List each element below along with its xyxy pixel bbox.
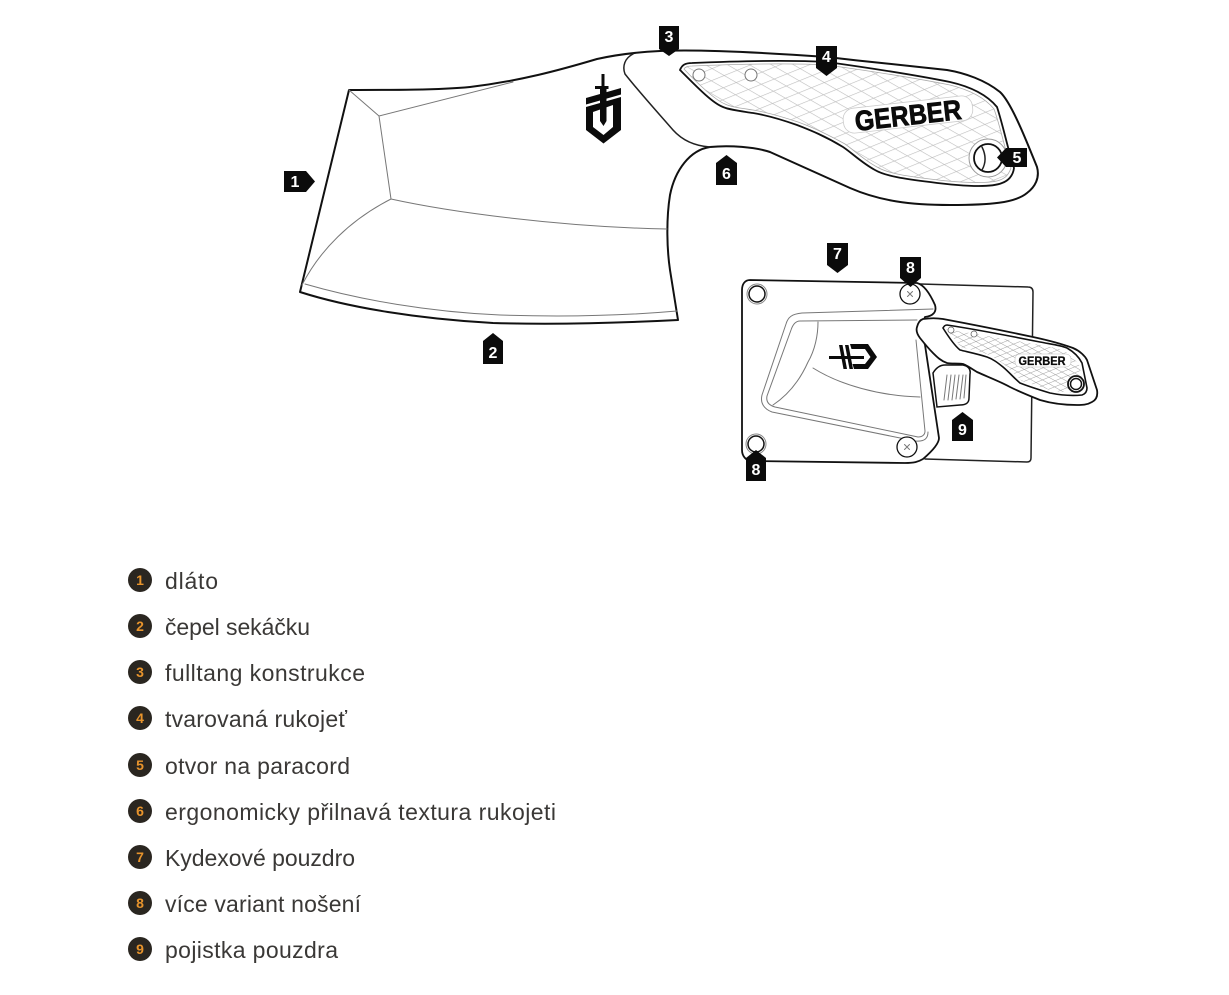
Gerber shield logo: [586, 74, 621, 144]
callout 5: [997, 148, 1027, 167]
paracord hole: [969, 139, 1007, 177]
handle scale with mesh texture: [680, 61, 1014, 186]
legend item 8: 8: [136, 895, 144, 911]
legend item 4: tvarovaná rukojeť: [165, 706, 347, 732]
legend list: [128, 568, 556, 963]
legend item 3: fulltang konstrukce: [165, 660, 365, 686]
legend item 5: otvor na paracord: [165, 753, 350, 779]
GERBER logo plate: GERBER: [853, 94, 963, 137]
legend item 1: dláto: [165, 568, 218, 594]
backing panel: [920, 284, 1033, 462]
legend item 1: [128, 568, 218, 594]
legend item 6: ergonomicky přilnavá textura rukojeti: [165, 799, 556, 825]
cleaver blade and handle outline: [300, 50, 1038, 324]
callout 7: [827, 243, 848, 273]
callout 2: [483, 333, 503, 364]
callout 2: 2: [489, 345, 498, 362]
legend item 1: 1: [136, 572, 144, 588]
callout 8 bottom: [746, 450, 766, 481]
legend item 6: 6: [136, 803, 144, 819]
callout 9: [952, 412, 973, 441]
small paracord hole: [1068, 376, 1084, 392]
kydex sheath outline: [742, 280, 939, 463]
legend item 9: pojistka pouzdra: [165, 937, 338, 963]
small handle: [917, 318, 1097, 405]
legend item 8: více variant nošení: [165, 891, 362, 917]
legend item 2: čepel sekáčku: [165, 614, 310, 640]
blade bevel lines: [302, 82, 677, 316]
callout 4: 4: [822, 49, 831, 66]
legend item 5: 5: [136, 757, 144, 773]
small handle scale: [943, 325, 1087, 395]
callout 4: [816, 46, 837, 76]
bolster line: [624, 54, 710, 147]
legend item 9: 9: [136, 941, 144, 957]
callout 6: 6: [722, 166, 731, 183]
callout 9: 9: [958, 422, 967, 439]
sheath latch: [933, 365, 970, 407]
legend item 7: 7: [136, 849, 144, 865]
callout 1: [284, 171, 315, 192]
callout 3: [659, 26, 679, 56]
legend item 4: 4: [136, 710, 144, 726]
callout 8 top: [900, 257, 921, 287]
sheath logo: [829, 344, 877, 369]
callout 5: 5: [1013, 150, 1022, 167]
illustration: cleaver: [300, 50, 1038, 324]
sheath contour lines: [761, 309, 933, 441]
callout 8 top: 8: [906, 260, 915, 277]
callout 3: 3: [665, 29, 674, 46]
callout 6: [716, 155, 737, 185]
callout 8 bottom: 8: [752, 462, 761, 479]
small GERBER plate: GERBER: [1018, 354, 1066, 368]
callout 7: 7: [833, 246, 842, 263]
callout 1: 1: [291, 174, 300, 191]
illustration: sheath with cleaver: [742, 280, 1097, 463]
legend item 3: 3: [136, 664, 144, 680]
rivets: [746, 284, 920, 457]
legend item 7: Kydexové pouzdro: [165, 845, 355, 871]
legend item 2: 2: [136, 618, 144, 634]
